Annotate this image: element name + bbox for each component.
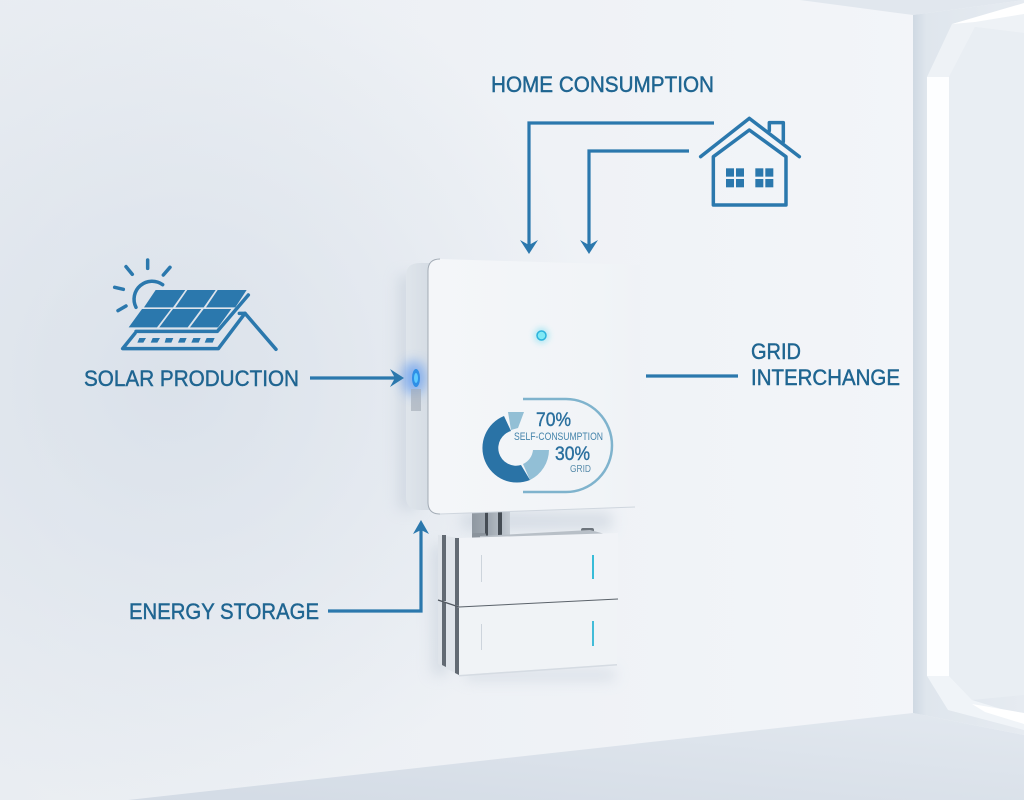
- battery cables: [472, 510, 605, 540]
- line: grid connection: [646, 374, 738, 378]
- arrow: solar to inverter: [310, 369, 404, 387]
- donut: top wedge: [508, 412, 524, 430]
- solar cells: [129, 290, 247, 327]
- label: solar production: SOLAR PRODUCTION: [84, 366, 299, 391]
- label: grid interchange: INTERCHANGE: [751, 365, 900, 390]
- label: self-consumption: SELF-CONSUMPTION: [514, 431, 603, 443]
- inverter side panel: [402, 263, 440, 510]
- label: grid: GRID: [570, 463, 591, 475]
- indicator: top battery cyan light: [592, 555, 594, 579]
- label: grid interchange: GRID: [751, 339, 801, 364]
- device shadow: [398, 275, 615, 680]
- icon: solar panel on roof: [115, 260, 276, 349]
- battery module: top: [438, 533, 618, 606]
- icon: house: [701, 118, 799, 205]
- arrow: storage to inverter: [328, 520, 429, 611]
- indicator: bottom battery left mark: [481, 624, 482, 650]
- label: grid interchange: [751, 339, 900, 390]
- donut: grid arc: [523, 450, 549, 480]
- sun: [115, 260, 170, 311]
- side vent: [411, 390, 421, 410]
- donut: self-consumption arc: [482, 416, 530, 483]
- side status light: [402, 361, 426, 395]
- arrow: home consumption outer: [520, 123, 714, 254]
- ceiling edge: [800, 0, 1024, 15]
- indicator: top battery left mark: [481, 555, 482, 582]
- bracket: [523, 399, 612, 492]
- label: energy storage: ENERGY STORAGE: [129, 599, 319, 624]
- value: 30%: 30%: [555, 444, 590, 465]
- roof and mount: [136, 295, 248, 331]
- arrow: home consumption inner: [580, 151, 689, 254]
- inverter front panel: [428, 259, 640, 514]
- indicator: bottom battery cyan light: [592, 621, 594, 646]
- floor: [128, 713, 1024, 800]
- value: 70%: 70%: [536, 410, 571, 431]
- heading: home consumption: HOME CONSUMPTION: [491, 72, 714, 97]
- right opening and window frame: [913, 0, 1024, 735]
- front status light: [534, 328, 550, 344]
- battery module: bottom: [438, 599, 618, 676]
- display: self-consumption donut and labels: [482, 399, 612, 492]
